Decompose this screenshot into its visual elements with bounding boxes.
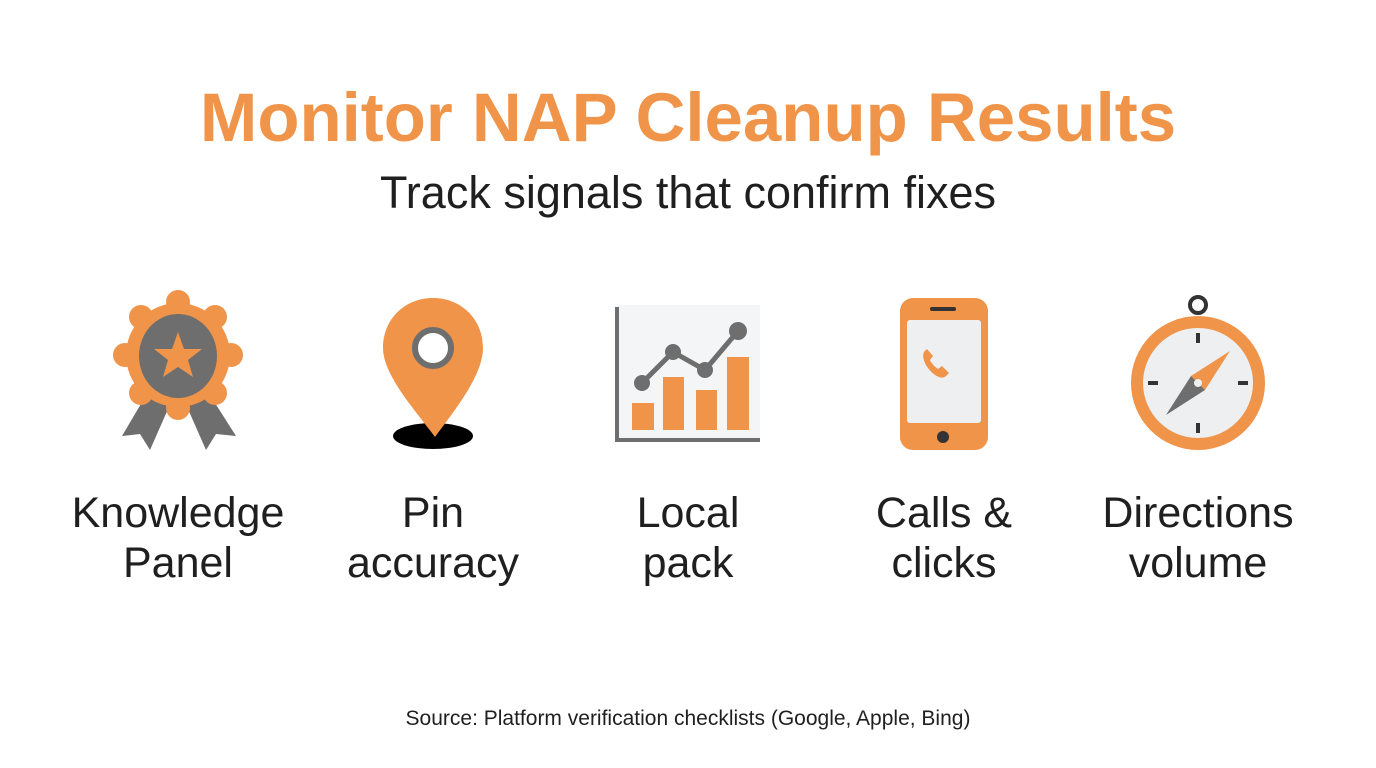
label: Local pack: Local: [637, 489, 739, 537]
label: Pin accuracy: accuracy: [347, 539, 519, 587]
title: Monitor NAP Cleanup Results: [200, 79, 1176, 156]
label: Calls & clicks: [876, 489, 1012, 587]
label: Pin accuracy: Pin: [402, 489, 464, 537]
source note: Source: Platform verification checklists (Google, Apple, Bing): [406, 707, 970, 730]
label: Local pack: pack: [643, 539, 733, 587]
label: Knowledge Panel: Panel: [123, 539, 233, 587]
label: Knowledge Panel: Knowledge: [72, 489, 284, 537]
label: Calls & clicks: clicks: [891, 539, 997, 587]
icon: location pin: [383, 298, 483, 449]
label: Directions volume: Directions: [1102, 489, 1294, 537]
icon: award badge: [113, 290, 243, 450]
icon: phone: [900, 298, 988, 450]
label: Pin accuracy: [347, 489, 519, 587]
label: Knowledge Panel: [72, 489, 284, 587]
subtitle: Track signals that confirm fixes: [380, 167, 996, 218]
label: Directions volume: volume: [1129, 539, 1267, 587]
label: Local pack: [637, 489, 739, 587]
icon: compass: [1131, 297, 1265, 450]
label: Directions volume: [1102, 489, 1294, 587]
icon: chart: [615, 305, 760, 440]
label: Calls & clicks: Calls &: [876, 489, 1012, 537]
